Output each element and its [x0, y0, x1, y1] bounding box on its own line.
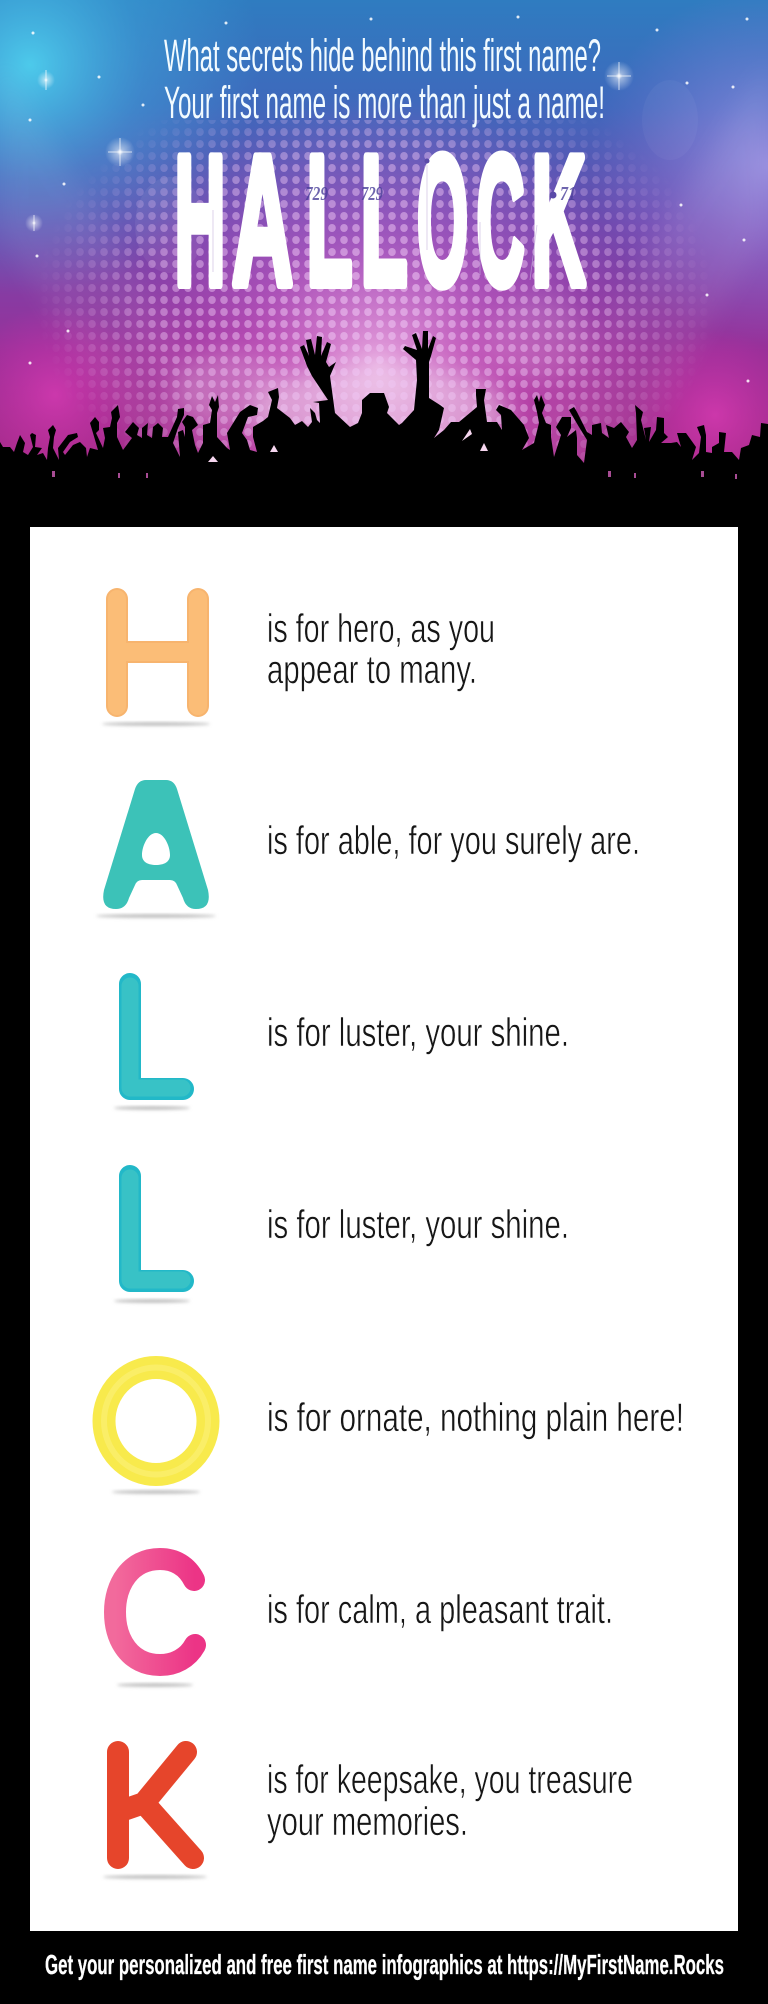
row A: [96, 780, 640, 918]
title: HALLOCK: A: [232, 117, 293, 323]
text: A: is for able, for you surely are.: [267, 819, 640, 863]
row O: [104, 1368, 684, 1494]
text: H line 2: appear to many.: [267, 648, 477, 692]
row L: [114, 984, 569, 1110]
title: HALLOCK: H: [174, 117, 226, 323]
icon: letter C: [115, 1559, 195, 1687]
icon: letter L second: [114, 1176, 190, 1303]
title: HALLOCK: 729: [305, 183, 328, 205]
row C: [115, 1559, 613, 1687]
crowd silhouette: [0, 331, 768, 530]
icon: letter L: [114, 984, 190, 1110]
title: HALLOCK: 71: [560, 183, 576, 205]
icon: letter A: [96, 780, 216, 918]
row H: [102, 599, 495, 726]
text: C: is for calm, a pleasant trait.: [267, 1588, 613, 1632]
text: L second: is for luster, your shine.: [267, 1203, 569, 1247]
title: HALLOCK: 729: [361, 183, 383, 205]
title: HALLOCK: L: [360, 117, 408, 323]
title: HALLOCK: [174, 117, 586, 323]
sparkles: [25, 16, 750, 382]
row L second: [114, 1176, 569, 1303]
text: K: is for keepsake, you treasure: [267, 1758, 633, 1802]
icon: letter O: [104, 1368, 208, 1494]
text: K line 2: your memories.: [267, 1800, 468, 1844]
icon: letter K: [103, 1752, 207, 1879]
title: HALLOCK: O: [417, 117, 468, 323]
row K: [103, 1752, 633, 1879]
hero background: stage lights: [0, 0, 768, 463]
text: H: is for hero, as you: [267, 607, 495, 651]
heading: tagline: [164, 30, 605, 128]
icon: letter H: [102, 599, 210, 726]
panel: name acrostic: [30, 527, 738, 1931]
title: HALLOCK: C: [476, 117, 524, 323]
text: K: [532, 117, 586, 323]
title: HALLOCK: L: [306, 117, 352, 323]
text: L: is for luster, your shine.: [267, 1011, 569, 1055]
